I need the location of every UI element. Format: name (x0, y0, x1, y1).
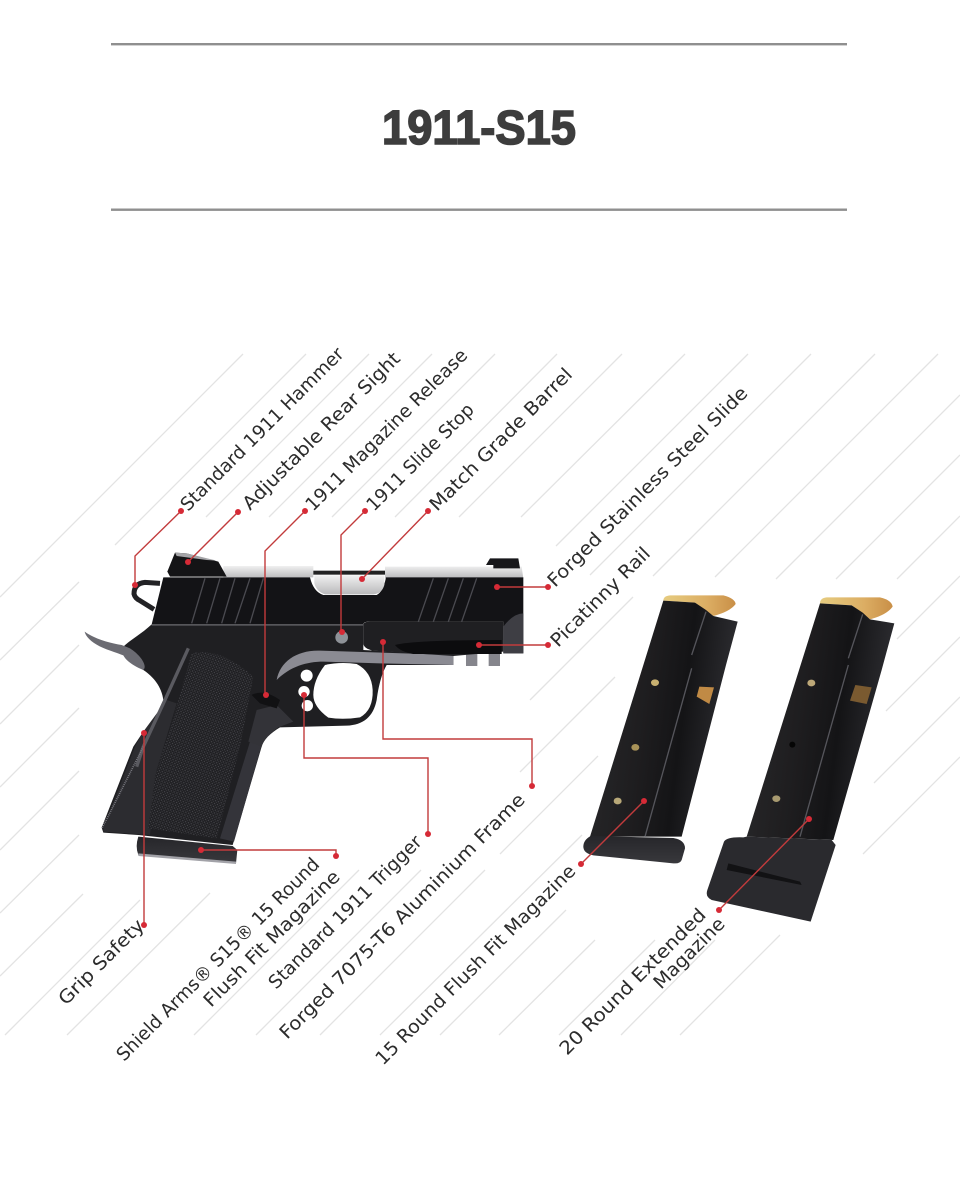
bullet (663, 595, 736, 616)
grip panel (148, 652, 253, 838)
trigger well (313, 663, 373, 719)
slide front shading (503, 613, 523, 653)
beavertail (85, 632, 145, 670)
label: shield arms flush fit magazine: Shield Arms® S15® 15 Round (113, 854, 324, 1066)
barrel (313, 571, 385, 594)
callout dots (132, 508, 812, 928)
rear strap serrations (102, 747, 143, 828)
rail slot (395, 640, 502, 654)
window and holes (850, 685, 872, 704)
window and holes (697, 687, 714, 704)
rail steps (466, 654, 500, 666)
front strap serrations (220, 742, 262, 842)
label: match grade barrel: Match Grade Barrel (426, 364, 577, 516)
rear sight (167, 553, 227, 577)
hammer (134, 582, 160, 609)
slide stop pin (335, 631, 348, 644)
grip safety streak (137, 648, 188, 767)
label: forged 7075-t6 aluminium frame: Forged 7075-T6 Aluminium Frame (276, 790, 530, 1044)
base plate (583, 836, 685, 863)
seam line (152, 623, 363, 626)
label: adjustable rear sight: Adjustable Rear Sight (239, 348, 405, 515)
label: grip safety: Grip Safety (55, 915, 149, 1010)
lightening holes (298, 670, 313, 711)
body (747, 603, 894, 840)
magazine release (252, 693, 280, 708)
label: shield arms flush fit magazine: Flush Fit Magazine (200, 867, 345, 1012)
20 round magazine (707, 597, 894, 922)
extended base (707, 837, 836, 922)
bottom rule (111, 208, 847, 211)
label: standard 1911 hammer: Standard 1911 Hammer (177, 343, 349, 516)
title: 1911-S15 (382, 102, 576, 155)
label: 1911 magazine release: 1911 Magazine Release (302, 345, 472, 516)
body (590, 601, 738, 837)
trigger guard highlight (277, 651, 453, 680)
slide (152, 577, 523, 653)
pistol frame and grip (102, 624, 453, 845)
label: 1911 slide stop: 1911 Slide Stop (363, 400, 479, 516)
stainless slide top (223, 566, 523, 578)
callout lines (135, 511, 809, 925)
label: forged stainless steel slide: Forged Stainless Steel Slide (544, 383, 752, 592)
label: picatinny rail: Picatinny Rail (547, 543, 655, 652)
lower frame shading (248, 705, 293, 747)
dust cover (363, 622, 503, 656)
backstrap shading (103, 700, 177, 835)
rear serrations (192, 578, 477, 623)
label: 15 round flush fit magazine: 15 Round Flush Fit Magazine (372, 861, 580, 1070)
front sight (486, 558, 520, 568)
top rule (111, 43, 847, 45)
magazine base (137, 837, 237, 863)
label: standard 1911 trigger: Standard 1911 Trigger (265, 831, 427, 994)
15 round magazine (583, 595, 738, 863)
label: 20 round extended magazine: 20 Round Extended (556, 905, 711, 1060)
label: 20 round extended magazine: Magazine (650, 914, 730, 994)
pistol (85, 553, 523, 864)
bullet (820, 597, 893, 619)
